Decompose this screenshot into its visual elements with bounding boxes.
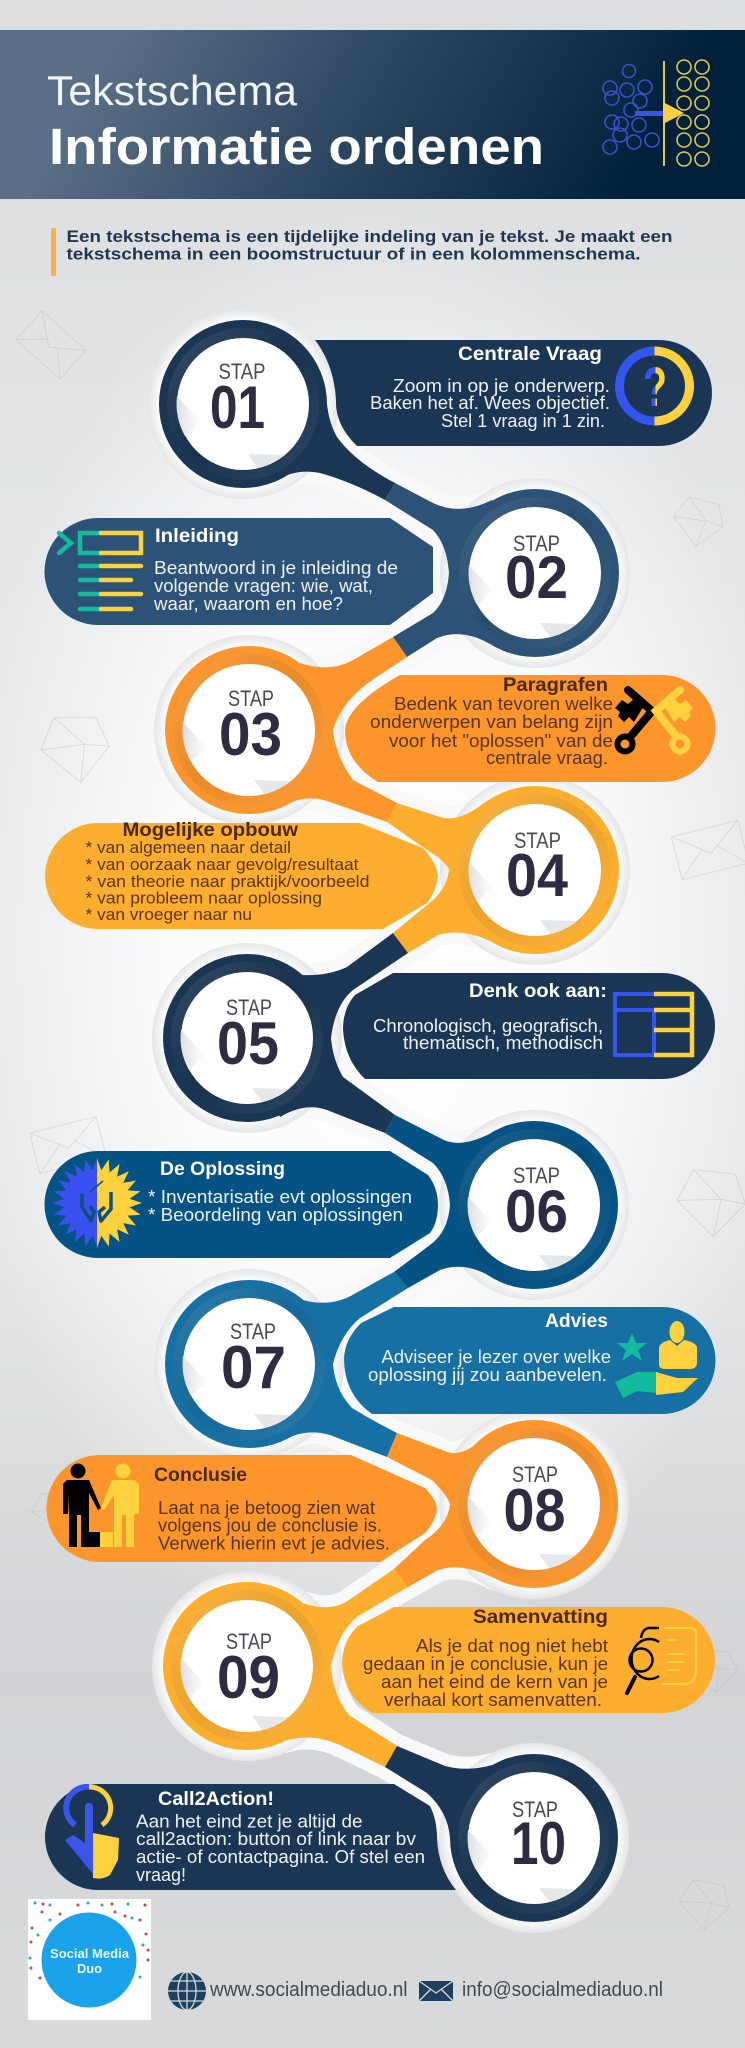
panel: de oplossing	[44, 1151, 438, 1258]
step 04: 04	[506, 842, 569, 909]
panel: paragrafen: Paragrafen	[503, 674, 608, 696]
icon: document outline	[59, 533, 141, 609]
intro accent bar	[51, 228, 56, 276]
panel: denk ook aan: thematisch, methodisch	[403, 1032, 603, 1053]
step 06: STAP	[513, 1163, 560, 1188]
icon: two figures with box	[63, 1464, 139, 1547]
panel: call2action: Aan het eind zet je altijd de	[136, 1812, 362, 1832]
icon: sorting circles with arrow	[603, 60, 709, 166]
icon: envelope	[419, 1981, 453, 2001]
title line 2: Informatie ordenen	[49, 118, 544, 175]
panel: inleiding	[44, 518, 433, 625]
step 03: STAP	[228, 686, 274, 711]
title line 1: Tekstschema	[47, 67, 298, 114]
step 03	[165, 646, 333, 814]
step 09: STAP	[226, 1629, 272, 1654]
icon: person on hand with star	[615, 1321, 698, 1398]
panel: call2action: vraag!	[136, 1865, 186, 1885]
panel: conclusie: volgens jou de conclusie is.	[158, 1514, 382, 1536]
step 02: 02	[505, 544, 568, 611]
ribbon halo	[148, 309, 630, 1933]
step 05: STAP	[226, 995, 272, 1020]
panel: samenvatting: Samenvatting	[473, 1606, 608, 1628]
panel: call2action: call2action: button of link naar bv	[136, 1829, 416, 1849]
step 01	[159, 320, 327, 488]
icon: question mark: ?	[643, 355, 667, 418]
panel: paragrafen: centrale vraag.	[486, 747, 608, 768]
step 09	[163, 1582, 331, 1750]
intro text: tekstschema in een boomstructuur of in een kolommenschema.	[66, 244, 640, 264]
intro text	[66, 227, 672, 264]
panel: samenvatting: gedaan in je conclusie, kun je	[363, 1653, 608, 1674]
panel: advies: oplossing jij zou aanbevelen.	[368, 1364, 607, 1385]
panel: advies: Adviseer je lezer over welke	[382, 1346, 611, 1367]
logo: social media duo: Duo	[77, 1961, 102, 1976]
step 09: 09	[217, 1644, 280, 1711]
panel: conclusie	[46, 1455, 437, 1562]
email text: info@socialmediaduo.nl	[462, 1979, 663, 2001]
icon: sunburst with hands	[52, 1158, 142, 1248]
panel: inleiding: Inleiding	[155, 525, 239, 547]
step 05	[163, 954, 331, 1122]
panel: denk ook aan	[343, 973, 715, 1079]
icon: table columns	[615, 994, 692, 1055]
step 06: 06	[505, 1178, 568, 1245]
step 04	[451, 786, 619, 954]
panel: inleiding: waar, waarom en hoe?	[153, 593, 343, 614]
icon: tapping finger	[65, 1787, 119, 1879]
panel: paragrafen: Bedenk van tevoren welke	[394, 693, 613, 714]
panel: de oplossing: * Inventarisatie evt oplossingen	[148, 1186, 412, 1207]
intro text: Een tekstschema is een tijdelijke indeling van je tekst. Je maakt een	[66, 227, 672, 246]
step 10	[450, 1754, 618, 1922]
icon: keys	[615, 690, 693, 752]
step 10: STAP	[512, 1797, 558, 1822]
panel: centrale vraag	[315, 340, 712, 446]
panel: conclusie: Conclusie	[154, 1464, 247, 1486]
step 08: STAP	[512, 1462, 558, 1487]
step 06	[450, 1121, 618, 1289]
step 01: 01	[210, 374, 265, 441]
website text: www.socialmediaduo.nl	[209, 1979, 408, 2001]
panel: centrale vraag: Baken het af. Wees objectief.	[370, 392, 610, 413]
panel: mogelijke opbouw: * van probleem naar oplossing	[86, 888, 322, 908]
panel: conclusie: Verwerk hierin evt je advies.	[158, 1532, 390, 1554]
panel: mogelijke opbouw: * van algemeen naar detail	[86, 838, 291, 857]
panel: centrale vraag: Zoom in op je onderwerp.	[393, 375, 610, 396]
step 07	[165, 1280, 333, 1448]
panel: denk ook aan: Chronologisch, geografisch,	[373, 1015, 603, 1036]
step 08	[450, 1420, 618, 1588]
step 02	[451, 489, 619, 657]
panel: call2action: actie- of contactpagina. Of stel een	[136, 1847, 425, 1867]
logo: social media duo	[28, 1899, 151, 2020]
panel: inleiding: Beantwoord in je inleiding de	[154, 557, 398, 578]
step 08: 08	[504, 1477, 566, 1544]
panel: samenvatting: Als je dat nog niet hebt	[416, 1635, 608, 1656]
panel: denk ook aan: Denk ook aan:	[469, 980, 607, 1002]
panel: mogelijke opbouw: Mogelijke opbouw	[122, 819, 299, 841]
step 07: STAP	[230, 1319, 276, 1344]
step 05: 05	[217, 1010, 279, 1077]
panel: paragrafen	[345, 674, 716, 782]
panel: samenvatting: verhaal kort samenvatten.	[384, 1689, 602, 1710]
step 10: 10	[511, 1810, 566, 1877]
panel: advies	[344, 1307, 716, 1414]
step 07: 07	[221, 1334, 286, 1401]
step 01: STAP	[218, 359, 266, 384]
panel: mogelijke opbouw: * van vroeger naar nu	[86, 905, 252, 924]
icon: question mark	[620, 351, 690, 421]
panel: paragrafen: voor het "oplossen" van de	[389, 730, 613, 751]
panel: samenvatting	[342, 1606, 715, 1713]
panel: mogelijke opbouw: * van oorzaak naar gevolg/resultaat	[86, 855, 359, 874]
panel: inleiding: volgende vragen: wie, wat,	[154, 575, 373, 596]
panel: call2action	[45, 1784, 456, 1890]
logo: social media duo: Social Media	[50, 1946, 130, 1961]
icon: globe	[168, 1972, 206, 2010]
panel: call2action: Call2Action!	[158, 1788, 274, 1810]
panel: paragrafen: onderwerpen van belang zijn	[370, 711, 613, 732]
step 03: 03	[219, 701, 282, 768]
background watermark icons	[16, 311, 745, 1934]
panel: centrale vraag: Centrale Vraag	[458, 343, 602, 365]
panel: mogelijke opbouw: * van theorie naar praktijk/voorbeeld	[86, 872, 370, 891]
panel: de oplossing: De Oplossing	[160, 1158, 285, 1180]
panel: samenvatting: aan het eind de kern van je	[381, 1671, 608, 1692]
panel: advies: Advies	[545, 1310, 608, 1332]
header banner	[0, 30, 745, 199]
connectors between steps	[243, 404, 535, 1838]
icon: magnifier over document	[627, 1628, 696, 1693]
panel: conclusie: Laat na je betoog zien wat	[158, 1497, 375, 1518]
panel: centrale vraag: Stel 1 vraag in 1 zin.	[441, 410, 605, 431]
panel: mogelijke opbouw	[45, 819, 438, 929]
step 04: STAP	[514, 828, 561, 853]
step 02: STAP	[513, 531, 560, 556]
panel: de oplossing: * Beoordeling van oplossingen	[148, 1204, 403, 1225]
